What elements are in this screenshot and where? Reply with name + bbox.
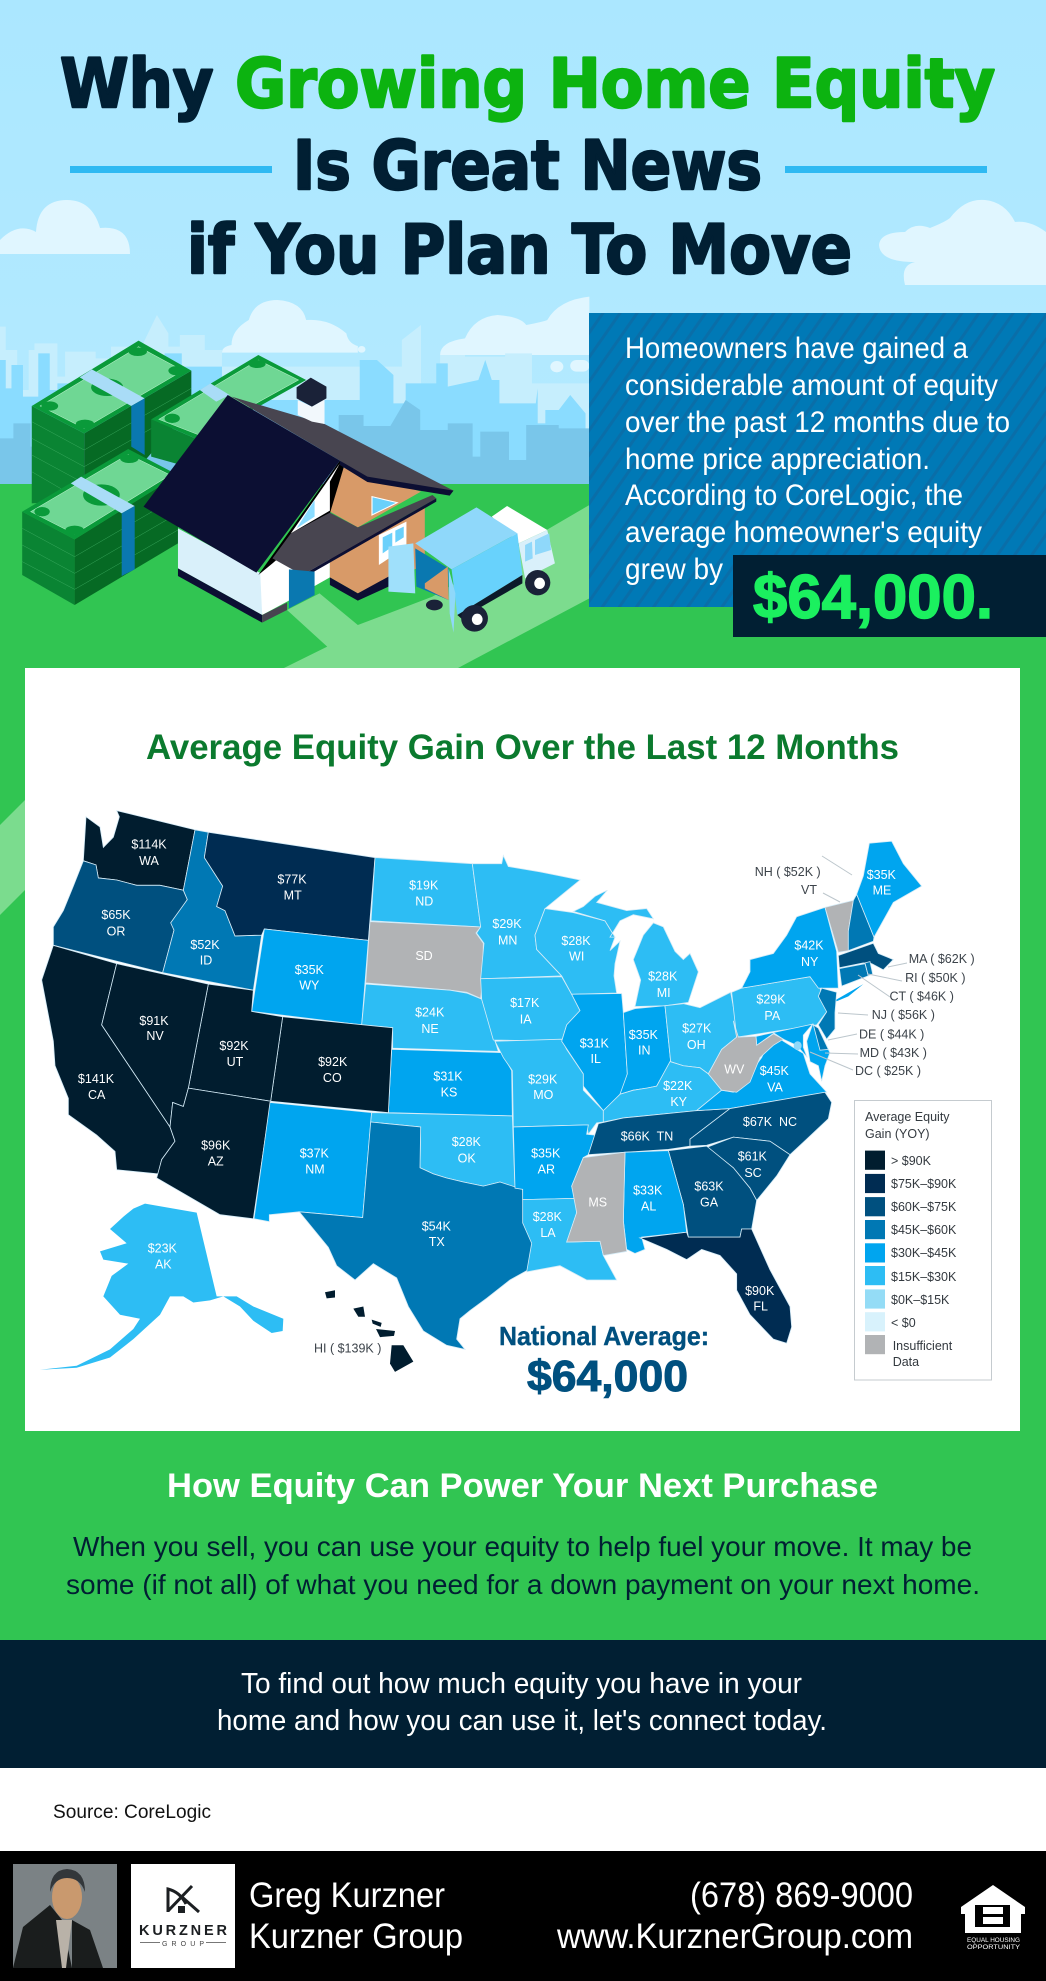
state: AZ bbox=[157, 1088, 271, 1219]
state: LA: $28K bbox=[533, 1210, 563, 1224]
state callouts: DC ( $25K ) bbox=[855, 1064, 921, 1078]
state: AL: $33K bbox=[633, 1183, 663, 1197]
state: PA: PA bbox=[764, 1009, 781, 1023]
state: AR: AR bbox=[538, 1162, 555, 1176]
state: NY: $42K bbox=[794, 938, 824, 952]
state: HI: HI ( $139K ) bbox=[314, 1342, 381, 1356]
legend: $45K–$60K bbox=[891, 1223, 957, 1237]
title line 1: Why Growing Home Equity bbox=[60, 45, 995, 124]
background: green ground bbox=[0, 484, 1046, 1640]
light green driveway bbox=[283, 505, 589, 668]
state: TX: $54K bbox=[422, 1220, 452, 1234]
chimney bbox=[298, 399, 325, 424]
state: MN bbox=[472, 856, 580, 979]
agent name: Greg Kurzner bbox=[249, 1876, 445, 1915]
state: OR bbox=[53, 861, 187, 973]
state: WA: WA bbox=[139, 854, 159, 868]
state: UT: $92K bbox=[219, 1039, 249, 1053]
state: MS bbox=[567, 1152, 627, 1256]
legend: < $0 bbox=[891, 1316, 916, 1330]
state: IL: IL bbox=[590, 1052, 601, 1066]
state: OH: $27K bbox=[682, 1022, 712, 1036]
state: CT bbox=[839, 964, 868, 986]
state: HI bbox=[314, 1290, 413, 1372]
state: NC bbox=[690, 1092, 832, 1155]
state: ND: $19K bbox=[409, 878, 439, 892]
state: ID: $52K bbox=[190, 938, 220, 952]
state: PA bbox=[732, 977, 827, 1037]
state: IA: $17K bbox=[510, 996, 540, 1010]
state: LA: LA bbox=[540, 1226, 556, 1240]
footer bar bbox=[0, 1851, 1046, 1981]
callout: $64,000 bbox=[733, 555, 1046, 637]
state: AK bbox=[40, 1204, 283, 1370]
legend: Average Equity bbox=[865, 1110, 950, 1124]
house bbox=[144, 378, 453, 623]
state: NE: NE bbox=[421, 1022, 439, 1036]
state: SC bbox=[707, 1137, 790, 1200]
peninsula: Delmarva bbox=[807, 1024, 830, 1081]
state: CA: CA bbox=[88, 1088, 106, 1102]
state: TN: $66K TN bbox=[621, 1129, 673, 1143]
state: UT: UT bbox=[227, 1055, 244, 1069]
state: VA: VA bbox=[767, 1080, 784, 1094]
state: KY: KY bbox=[670, 1095, 688, 1109]
state: OR: $65K bbox=[101, 908, 131, 922]
money stack front bbox=[22, 449, 178, 605]
state: WI bbox=[535, 909, 620, 994]
title rule left bbox=[70, 166, 272, 173]
contact details bbox=[556, 1876, 913, 1956]
state: OR: OR bbox=[107, 924, 125, 938]
text block: how equity helps: When you sell, you can use your equity to help fuel your move. It may be bbox=[73, 1531, 972, 1562]
state: ME bbox=[857, 841, 922, 937]
state: SC: SC bbox=[744, 1166, 762, 1180]
text block: how equity helps: some (if not all) of what you need for a down payment on your next home. bbox=[66, 1569, 980, 1600]
state: MO: $29K bbox=[528, 1073, 558, 1087]
contact details: (678) 869-9000 bbox=[690, 1876, 913, 1915]
state: MT: MT bbox=[284, 889, 302, 903]
panel: intro text: average homeowner's equity bbox=[625, 516, 982, 549]
panel: call to action: home and how you can use it, let's connect today. bbox=[217, 1705, 827, 1737]
state: GA: $63K bbox=[694, 1180, 724, 1194]
state: VT bbox=[825, 900, 853, 952]
panel: intro text: home price appreciation. bbox=[625, 443, 930, 476]
state callouts: VT bbox=[801, 883, 817, 897]
state: MN: $29K bbox=[492, 917, 522, 931]
contact details: www.KurznerGroup.com bbox=[556, 1917, 913, 1956]
state: CO: CO bbox=[323, 1071, 342, 1085]
agent name bbox=[249, 1876, 463, 1956]
state: AK: AK bbox=[155, 1258, 172, 1272]
money stack back right bbox=[151, 355, 306, 470]
state: PA: $29K bbox=[756, 993, 786, 1007]
heading: how equity can power your next purchase: How Equity Can Power Your Next Purchase bbox=[167, 1467, 878, 1505]
state: NV: NV bbox=[146, 1029, 164, 1043]
state: WY bbox=[252, 929, 368, 1025]
panel: map bbox=[25, 668, 1020, 1431]
state: MI upper bbox=[573, 890, 653, 937]
panel: intro text: grew by bbox=[625, 553, 723, 586]
state: NV bbox=[102, 964, 208, 1127]
state: NY: NY bbox=[801, 955, 819, 969]
legend: $15K–$30K bbox=[891, 1270, 957, 1284]
state: NY Long Island bbox=[835, 984, 863, 1001]
state: AZ: $96K bbox=[201, 1138, 231, 1152]
panel: intro text: Homeowners have gained a bbox=[625, 332, 968, 365]
panel: intro text: According to CoreLogic, the bbox=[625, 479, 963, 512]
state callouts: NH ( $52K ) bbox=[755, 865, 821, 879]
legend: Gain (YOY) bbox=[865, 1127, 930, 1141]
decorative light green band bbox=[0, 800, 25, 915]
icon: equal housing opportunity bbox=[961, 1885, 1025, 1951]
state: NM bbox=[254, 1102, 372, 1222]
state: TN bbox=[588, 1109, 730, 1155]
state: NJ bbox=[818, 988, 837, 1039]
state callouts: CT ( $46K ) bbox=[890, 989, 954, 1003]
state: AZ: AZ bbox=[208, 1155, 224, 1169]
panel: intro text: over the past 12 months due to bbox=[625, 406, 1010, 439]
state: AL bbox=[623, 1151, 687, 1253]
cloud right bbox=[879, 200, 1046, 285]
state: NM: $37K bbox=[300, 1147, 330, 1161]
state: WV bbox=[708, 1021, 783, 1092]
state: MS: MS bbox=[588, 1196, 607, 1210]
state: MA bbox=[838, 943, 893, 970]
state: FL: $90K bbox=[745, 1284, 775, 1298]
state: CA bbox=[42, 945, 175, 1174]
state: AR: $35K bbox=[531, 1147, 561, 1161]
source note: Source: CoreLogic bbox=[53, 1802, 211, 1823]
state: IN bbox=[620, 1006, 671, 1094]
state: WI: WI bbox=[569, 949, 584, 963]
state: IN: $35K bbox=[629, 1028, 659, 1042]
callout: national average bbox=[499, 1321, 709, 1401]
skyline middle layer bbox=[0, 353, 586, 484]
state: WV: WV bbox=[724, 1062, 745, 1076]
text block: how equity helps bbox=[66, 1531, 980, 1600]
choropleth map of US states bbox=[40, 811, 975, 1372]
state: MD bbox=[756, 1024, 813, 1058]
legend: $0K–$15K bbox=[891, 1293, 950, 1307]
state: KY bbox=[603, 1062, 722, 1122]
state: VA bbox=[697, 1033, 827, 1111]
state: WY: WY bbox=[299, 978, 320, 992]
leader lines bbox=[810, 856, 907, 1070]
state: WY: $35K bbox=[295, 963, 325, 977]
skyline back layer bbox=[0, 315, 589, 484]
state: VA: $45K bbox=[760, 1064, 790, 1078]
state: MN: MN bbox=[498, 934, 517, 948]
state: SC: $61K bbox=[738, 1149, 768, 1163]
state: ND: ND bbox=[415, 895, 433, 909]
agent photo bbox=[13, 1864, 117, 1968]
panel: call to action bbox=[0, 1640, 1046, 1768]
state: DC bbox=[794, 1041, 802, 1050]
state callouts: MD ( $43K ) bbox=[860, 1046, 927, 1060]
state: SD: SD bbox=[415, 949, 433, 963]
state: AR bbox=[513, 1125, 595, 1200]
state: MI: MI bbox=[657, 986, 671, 1000]
state: ID bbox=[163, 830, 262, 990]
money stack back left bbox=[32, 341, 191, 503]
panel: call to action: To find out how much equity you have in your bbox=[241, 1668, 802, 1700]
legend: Insufficient bbox=[893, 1339, 953, 1353]
state callouts: RI ( $50K ) bbox=[905, 971, 966, 985]
state: MI: $28K bbox=[648, 969, 678, 983]
illustration: skyline, house, money and truck bbox=[0, 297, 589, 668]
background: sky bbox=[0, 0, 1046, 484]
title line 2: Is Great News bbox=[293, 127, 762, 206]
icon: equal housing opportunity: EQUAL HOUSING bbox=[967, 1937, 1020, 1944]
state: MO: MO bbox=[533, 1088, 554, 1102]
legend: $75K–$90K bbox=[891, 1177, 957, 1191]
moving truck bbox=[388, 506, 555, 633]
state: WA bbox=[83, 811, 195, 890]
logo: GROUP bbox=[162, 1941, 204, 1948]
legend: > $90K bbox=[891, 1154, 932, 1168]
state: MT: $77K bbox=[277, 872, 307, 886]
agent name: Kurzner Group bbox=[249, 1917, 463, 1956]
state: UT bbox=[188, 984, 283, 1101]
logo: KURZNER bbox=[139, 1923, 228, 1939]
state: GA: GA bbox=[700, 1196, 719, 1210]
state: TX: TX bbox=[429, 1235, 445, 1249]
state: MT bbox=[204, 832, 375, 940]
state: MO bbox=[495, 1039, 603, 1134]
state callouts bbox=[755, 865, 975, 1078]
state: NV: $91K bbox=[139, 1014, 169, 1028]
small circles near panel bbox=[550, 360, 589, 372]
state: KY: $22K bbox=[663, 1079, 693, 1093]
legend: Data bbox=[893, 1355, 919, 1369]
state: MI bbox=[633, 923, 698, 1007]
state: IA: IA bbox=[520, 1012, 532, 1026]
state: NE bbox=[362, 984, 498, 1051]
icon: equal housing opportunity: OPPORTUNITY bbox=[967, 1944, 1021, 1951]
state: AL: AL bbox=[641, 1200, 656, 1214]
state: LA bbox=[523, 1198, 617, 1280]
state callouts: DE ( $44K ) bbox=[859, 1027, 924, 1041]
state: OH bbox=[665, 992, 737, 1074]
state: WI: $28K bbox=[561, 934, 591, 948]
state: OH: OH bbox=[687, 1038, 706, 1052]
state: CO bbox=[271, 1017, 393, 1113]
title rule right bbox=[785, 166, 987, 173]
state: DE bbox=[813, 1025, 828, 1050]
state callouts: MA ( $62K ) bbox=[909, 952, 975, 966]
state: ME: $35K bbox=[867, 868, 897, 882]
state: KS: $31K bbox=[433, 1069, 463, 1083]
callout: national average: National Average: bbox=[499, 1321, 709, 1351]
state: IA bbox=[481, 977, 580, 1041]
state: OK bbox=[371, 1113, 515, 1188]
callout: national average: $64,000 bbox=[527, 1352, 688, 1401]
state: FL bbox=[640, 1229, 792, 1343]
state: IL: $31K bbox=[580, 1036, 610, 1050]
state: IL bbox=[562, 993, 627, 1111]
state: FL: FL bbox=[753, 1300, 768, 1314]
state: NH bbox=[848, 894, 874, 951]
state: ND bbox=[371, 858, 481, 927]
state: GA bbox=[668, 1146, 757, 1237]
panel: intro text: considerable amount of equity bbox=[625, 369, 998, 402]
map heading: Average Equity Gain Over the Last 12 Months bbox=[146, 728, 899, 767]
state: WA: $114K bbox=[131, 838, 167, 852]
skyline front layer bbox=[0, 400, 589, 484]
state: SD bbox=[366, 922, 483, 998]
clouds behind skyline bbox=[222, 297, 589, 355]
logo bbox=[131, 1864, 235, 1968]
state: CO: $92K bbox=[318, 1055, 348, 1069]
title bbox=[60, 45, 995, 290]
callout: $64,000: $64,000. bbox=[753, 563, 993, 632]
state: AK: $23K bbox=[148, 1241, 178, 1255]
state: KS: KS bbox=[441, 1085, 457, 1099]
state: IN: IN bbox=[638, 1044, 651, 1058]
state: ME: ME bbox=[873, 883, 891, 897]
state: NY bbox=[742, 907, 838, 988]
state: NC: $67K NC bbox=[743, 1115, 797, 1129]
state: TX bbox=[299, 1122, 533, 1349]
panel: intro text bbox=[589, 313, 1046, 607]
state: NM: NM bbox=[305, 1162, 325, 1176]
legend: $60K–$75K bbox=[891, 1200, 957, 1214]
state: CA: $141K bbox=[78, 1072, 115, 1086]
cloud left bbox=[0, 200, 130, 254]
legend bbox=[854, 1100, 992, 1380]
state: OK: $28K bbox=[452, 1135, 482, 1149]
state: KS bbox=[388, 1049, 512, 1116]
legend: $30K–$45K bbox=[891, 1246, 957, 1260]
state callouts: NJ ( $56K ) bbox=[872, 1008, 935, 1022]
state: ID: ID bbox=[200, 954, 212, 968]
title line 3: if You Plan To Move bbox=[187, 211, 852, 290]
state: OK: OK bbox=[458, 1152, 476, 1166]
state: NE: $24K bbox=[415, 1006, 445, 1020]
state: RI bbox=[865, 962, 873, 976]
